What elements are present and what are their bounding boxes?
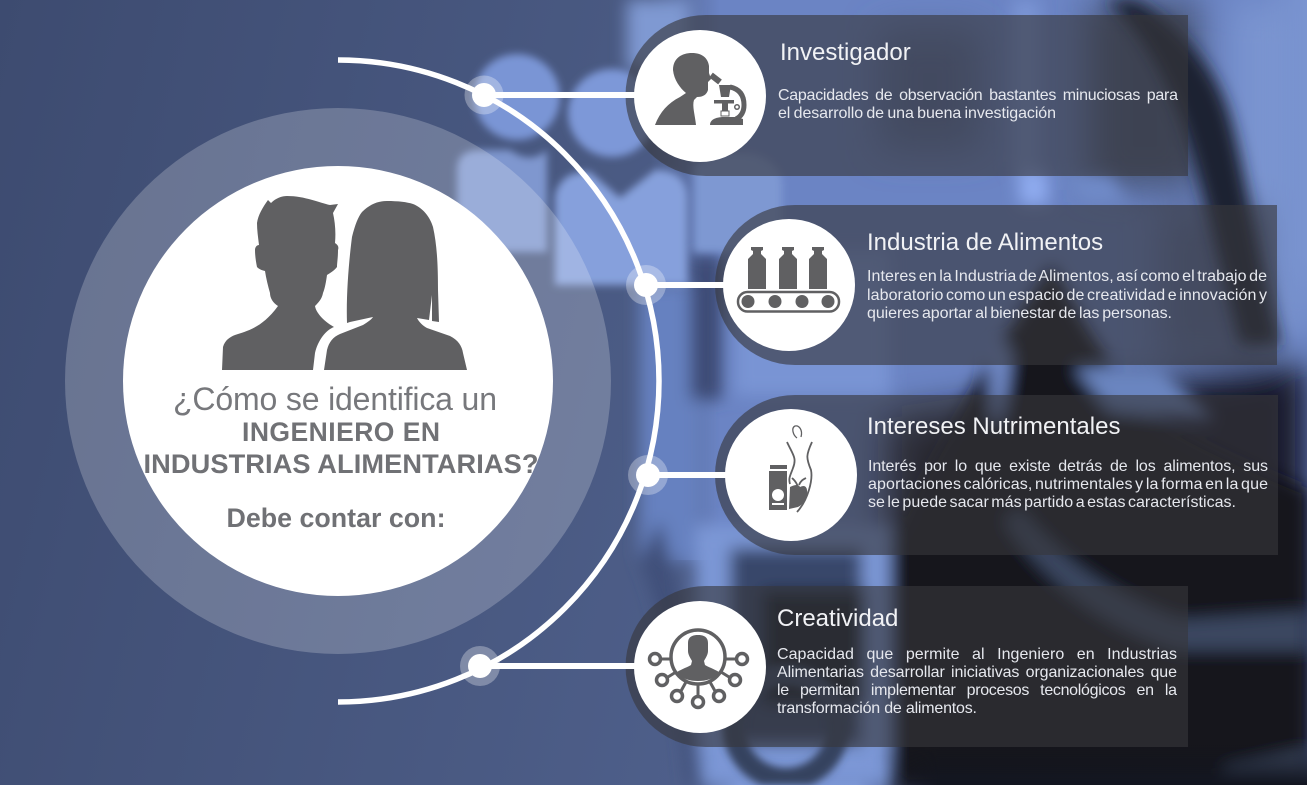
heading: Intereses Nutrimentales [867,413,1120,440]
connector and node 2 [626,265,726,305]
text block: laboratorio como un espacio de creatividad e innovación y [867,287,1267,304]
title [144,381,538,533]
connector and node 3 [628,455,728,495]
text block [778,87,1178,122]
text block [867,268,1267,322]
text block: Interés por lo que existe detrás de los alimentos, sus [868,458,1268,475]
outer translucent circle [65,108,611,654]
icon: person network [634,601,766,733]
text block: transformación de alimentos. [777,700,977,717]
title: ¿Cómo se identifica un [173,381,497,417]
connector and node 4 [460,646,636,686]
icon: researcher with microscope [634,30,766,162]
icon: bottles on conveyor [723,219,855,351]
text block: se le puede sacar más partido a estas características. [868,494,1236,511]
heading: Industria de Alimentos [867,229,1103,256]
panel: card Investigador [464,15,1188,176]
text block: Capacidades de observación bastantes minuciosas para [778,87,1178,104]
text block [868,458,1268,511]
text block: quieres aportar al bienestar de las personas. [867,305,1172,322]
title: INDUSTRIAS ALIMENTARIAS? [144,448,538,479]
icon: nutrition product, body and apple [725,409,857,541]
heading: Investigador [780,39,911,66]
connector and node 1 [464,76,636,114]
panel: card Intereses Nutrimentales [628,395,1278,555]
title: INGENIERO EN [242,417,440,447]
text block: Capacidad que permite al Ingeniero en Industrias [777,646,1177,663]
text block: Interes en la Industria de Alimentos, así como el trabajo de [867,268,1267,285]
panel: card Creatividad [460,586,1188,747]
panel: card Industria de Alimentos [626,205,1277,365]
photo ring at bottom [723,664,849,785]
text block: el desarrollo de una buena investigación [778,105,1056,122]
icon: man and woman silhouettes [222,196,467,370]
text block: le permitan implementar procesos tecnológicos en la [777,682,1177,699]
text block: Alimentarias desarrollar iniciativas organizacionales que [777,664,1177,681]
title: Debe contar con: [226,503,446,533]
heading: Creatividad [777,605,898,632]
text block: aportaciones calóricas, nutrimentales y la forma en la que [868,476,1268,493]
curved timeline arc [338,60,659,702]
text block [777,646,1177,717]
central white circle [123,166,553,596]
